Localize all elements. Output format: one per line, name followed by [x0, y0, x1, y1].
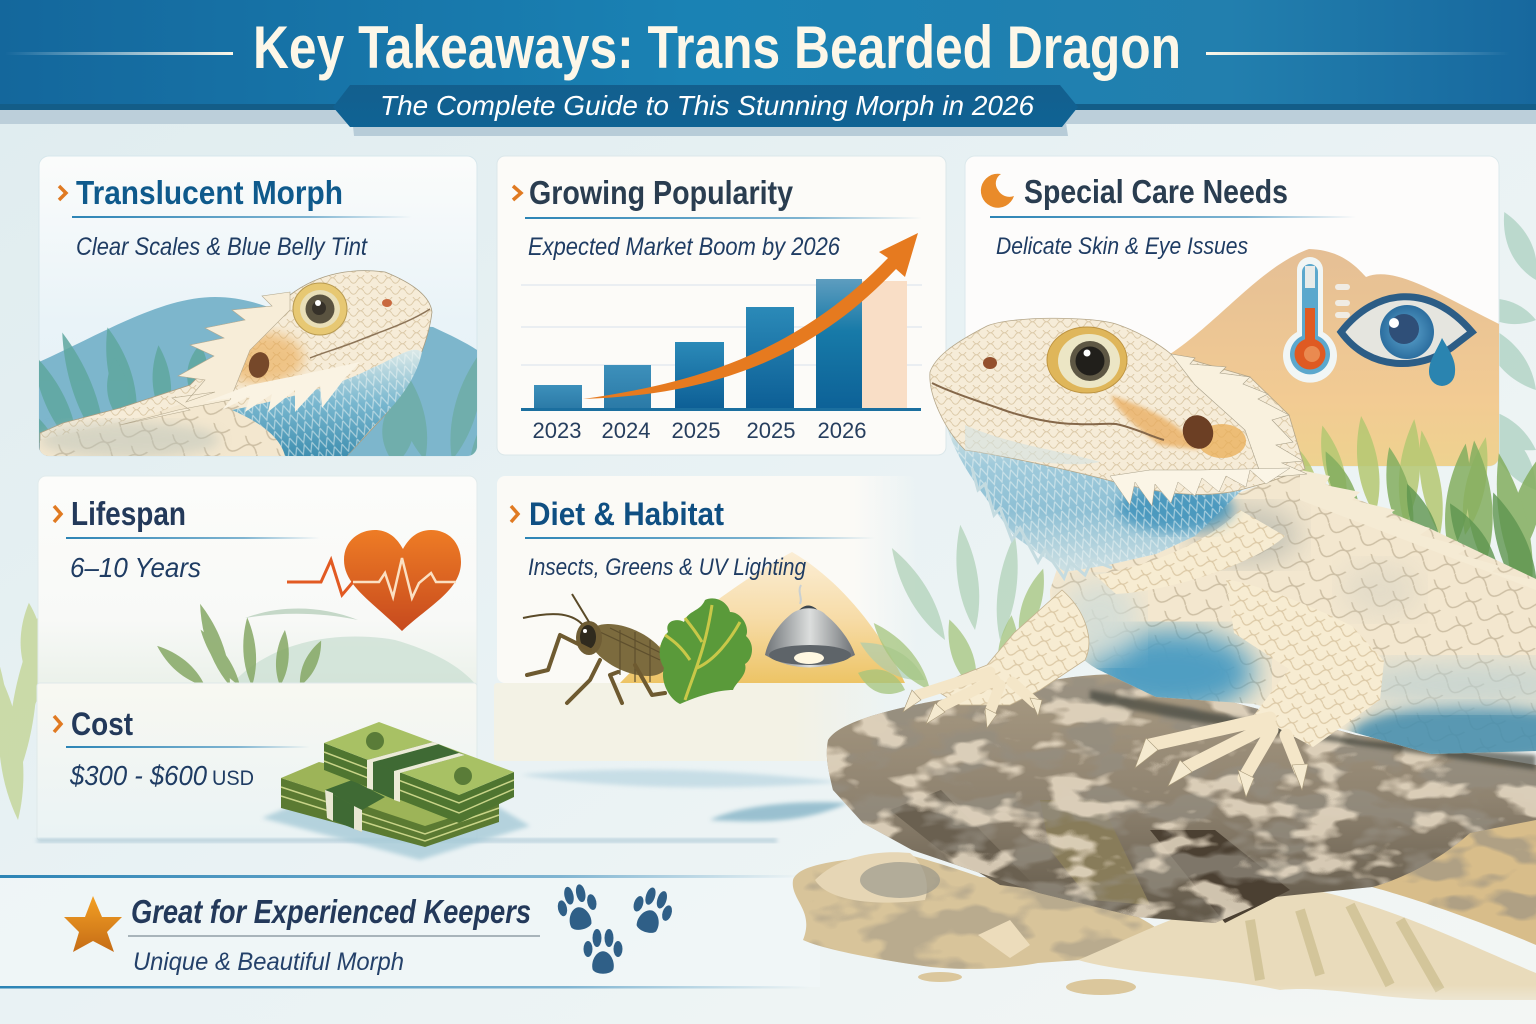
divider — [990, 216, 1356, 218]
beard — [945, 420, 1266, 578]
chevron — [513, 186, 521, 200]
trend arrow — [583, 233, 918, 399]
panel: growing popularity — [497, 156, 946, 455]
value: $300 - $600 — [69, 760, 207, 791]
background foliage: right edge — [1453, 207, 1536, 498]
tan hills — [1171, 249, 1499, 466]
heading: Cost — [71, 706, 133, 742]
upper stack — [324, 743, 514, 823]
panel: experienced keepers banner — [0, 875, 820, 988]
ear — [248, 352, 270, 378]
panel: lifespan — [38, 476, 477, 696]
lower faded panel — [494, 683, 894, 761]
year labels: 2024 — [602, 418, 650, 443]
header band — [0, 0, 1536, 136]
heading: Growing Popularity — [529, 174, 794, 211]
description: Delicate Skin & Eye Issues — [996, 233, 1248, 260]
icon: cricket — [523, 594, 675, 703]
icon: thermometer — [1283, 257, 1350, 383]
divider — [72, 216, 412, 218]
scenery: hill and grass — [157, 604, 474, 682]
subtitle: The Complete Guide to This Stunning Morph in 2026 — [380, 90, 1034, 121]
chevron — [511, 506, 518, 522]
icon: heart — [287, 530, 461, 631]
divider — [128, 935, 540, 937]
heading: Special Care Needs — [1024, 173, 1288, 210]
chevron — [59, 186, 66, 200]
year labels — [533, 418, 866, 443]
description: Clear Scales & Blue Belly Tint — [76, 233, 368, 261]
divider — [66, 746, 310, 748]
background foliage: left — [0, 592, 153, 821]
icon: star — [64, 896, 122, 952]
throat frill — [1095, 510, 1285, 594]
foliage: front left — [854, 523, 1024, 690]
rock — [827, 674, 1536, 923]
lower stack — [281, 778, 499, 847]
title decoration: right rule — [1206, 52, 1510, 55]
year labels: 2025 — [672, 418, 720, 443]
panel: cost — [37, 683, 777, 843]
divider — [66, 537, 320, 539]
chevron — [54, 716, 61, 732]
head crest spikes — [1171, 354, 1307, 478]
bar chart — [521, 233, 922, 443]
heading: Lifespan — [71, 495, 186, 532]
panel: diet and habitat — [497, 476, 917, 683]
main dragon — [903, 318, 1536, 797]
year labels: 2026 — [818, 418, 866, 443]
title decoration: left rule — [5, 52, 233, 55]
foliage: behind dragon — [854, 415, 1536, 701]
icon: eye with tear — [1341, 297, 1472, 386]
subtitle ribbon shadow — [350, 96, 1068, 136]
spikes — [120, 292, 290, 425]
title: Key Takeaways: Trans Bearded Dragon — [253, 14, 1181, 81]
heading: Translucent Morph — [76, 174, 343, 211]
year labels: 2025 — [747, 418, 795, 443]
mouth — [310, 309, 430, 358]
head — [930, 318, 1307, 506]
eye — [1047, 327, 1127, 393]
back spikes — [1300, 470, 1536, 590]
divider — [525, 217, 922, 219]
rear front leg — [1135, 579, 1384, 797]
panel: translucent morph — [38, 156, 478, 456]
description: Insects, Greens & UV Lighting — [528, 554, 807, 581]
icon: UV lamp — [765, 585, 855, 668]
divider — [525, 537, 875, 539]
nostril — [382, 299, 392, 307]
mouth — [932, 383, 1164, 440]
icon: paw prints — [554, 882, 678, 974]
front leg — [903, 590, 1089, 728]
unit: USD — [212, 767, 254, 790]
rubble and sand — [793, 805, 1536, 1024]
scenery: sandy hill — [620, 552, 905, 683]
description: Expected Market Boom by 2026 — [528, 233, 840, 261]
icon: crescent — [981, 174, 1014, 208]
rock blotches — [827, 674, 1536, 923]
eye — [293, 283, 347, 335]
small dragon — [40, 271, 432, 458]
heading: Great for Experienced Keepers — [131, 893, 531, 930]
chevron — [54, 506, 61, 522]
heading: Diet & Habitat — [529, 496, 724, 532]
subtitle ribbon — [333, 85, 1078, 127]
body — [1050, 470, 1536, 765]
icon: leafy greens — [660, 598, 752, 704]
ear — [1178, 411, 1218, 453]
blue hills — [39, 297, 477, 456]
grass left — [39, 328, 206, 443]
icon: money stacks — [262, 722, 530, 860]
grass right — [382, 358, 477, 456]
panel: special care needs — [965, 156, 1499, 466]
water shadows — [520, 770, 848, 821]
year labels: 2023 — [533, 418, 581, 443]
value: 6–10 Years — [70, 552, 201, 583]
description: Unique & Beautiful Morph — [133, 948, 404, 976]
nostril — [983, 357, 997, 369]
jaw spikes — [1110, 468, 1290, 506]
